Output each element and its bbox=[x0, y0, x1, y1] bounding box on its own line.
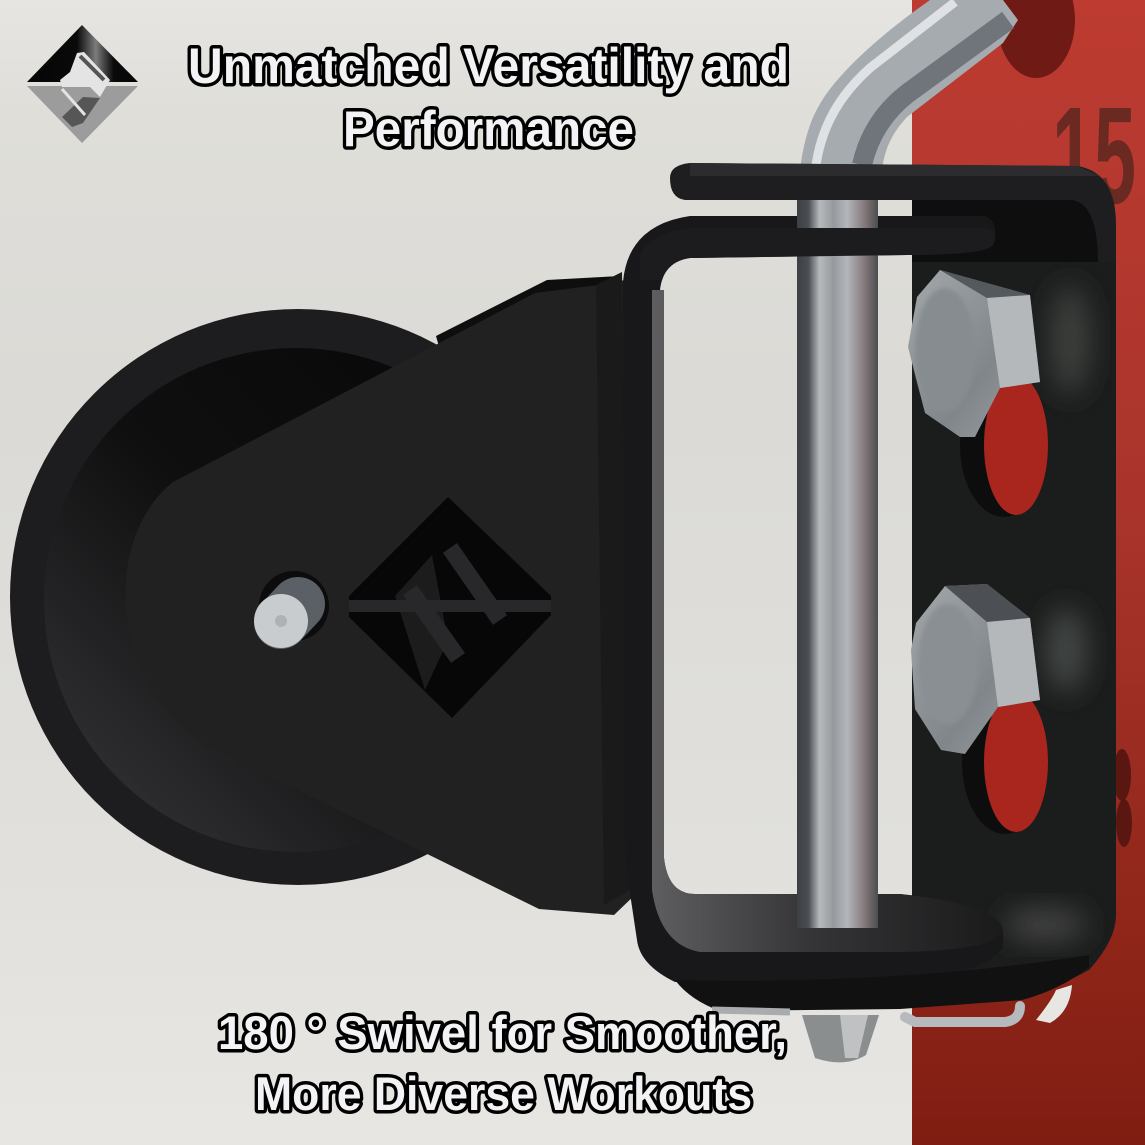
top plate band bbox=[670, 163, 1116, 262]
red upright post bbox=[912, 0, 1145, 1145]
gap at bracket corner bbox=[1036, 985, 1072, 1023]
diamond logo cutout bbox=[349, 497, 551, 718]
bottom clip and pin tip bbox=[712, 1006, 1020, 1062]
pulley wheel bbox=[10, 309, 586, 885]
title bbox=[188, 38, 789, 157]
pulley side plate with diamond cutout bbox=[125, 272, 640, 915]
lower washer band bbox=[675, 955, 1089, 1011]
square swivel frame bbox=[623, 216, 1003, 982]
logo: diamond mark bbox=[27, 25, 138, 143]
title: Unmatched Versatility and bbox=[188, 38, 789, 94]
lower slot bbox=[962, 690, 1048, 834]
bent handle of locking pin bbox=[800, 0, 1018, 170]
upper slot bbox=[960, 373, 1048, 517]
caption: 180 ° Swivel for Smoother, bbox=[218, 1006, 787, 1059]
rear plate edge behind the pulley housing bbox=[436, 276, 620, 350]
locking pin shaft bbox=[797, 198, 878, 928]
top of swivel frame over pin bbox=[640, 228, 995, 280]
rivets on post edge bbox=[1113, 749, 1132, 847]
inner lit edge bbox=[652, 290, 1003, 952]
lower hex bolt bbox=[911, 584, 1040, 754]
steel bracket plate on post bbox=[912, 200, 1116, 985]
caption: More Diverse Workouts bbox=[255, 1067, 752, 1120]
axle bolt bbox=[254, 571, 329, 648]
title: Performance bbox=[343, 101, 634, 157]
caption bbox=[218, 1006, 787, 1120]
upper hex bolt bbox=[908, 270, 1040, 437]
